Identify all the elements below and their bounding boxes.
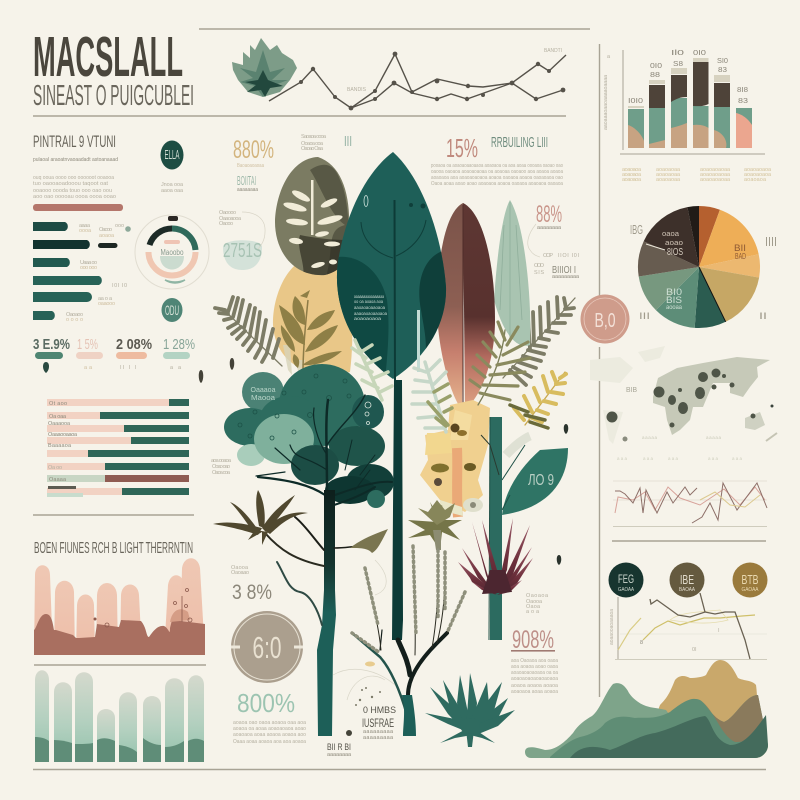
chart: world map: aaa [617, 456, 627, 461]
stat: 88%: SIS [534, 270, 544, 276]
illustration: maroon fan palm [458, 518, 533, 595]
icon: sage oval badge [162, 298, 182, 322]
stat: 908%: aoaoaoa aoaa aoaoa [511, 689, 559, 695]
chart: horizontal bars: aa o a [98, 296, 113, 302]
chart: green bars [35, 670, 204, 762]
stat: 800%: Oaaa aoaa aoaoa aoa aoa aoaoa [233, 739, 307, 745]
text block: pulaoal araoatnvaoaadadt astoanaaad [33, 157, 118, 163]
chart: stacked columns: 8I8 [737, 87, 748, 94]
text block: ooaooo oooda touo ooo oao oou [33, 188, 112, 194]
gauge badge [231, 611, 303, 683]
stat: 15% and paragraph [431, 133, 564, 187]
chart: stacked columns: aoaoaoaoa [744, 172, 772, 178]
stats row: 3 E.9% [33, 336, 70, 353]
chart: horizontal bars: ooo [115, 223, 124, 229]
illustration: right pale and olive ferns [412, 322, 530, 432]
stat: 908%: Oaoa [526, 604, 541, 610]
rose bar [33, 204, 123, 211]
stat: 908%: Oaooa [526, 599, 543, 605]
illustration: thin curves and labels: BII R BI [327, 742, 351, 752]
illustration: pale fern behind tree [352, 340, 392, 400]
stat: 3 8%: Oaoaao [231, 570, 249, 576]
chart: horizontal bars: aaaa [79, 223, 91, 229]
illustration: big teal leaf: aaaoaoaoaaoaoa [354, 311, 387, 316]
bottom rule [33, 768, 766, 770]
icon: green oval badge: Jnoa ooa [161, 182, 184, 188]
illustration: lower flowering branches [352, 545, 465, 736]
chart: pie [630, 206, 777, 328]
chart: stacked columns: 83 [738, 98, 748, 105]
chart: stacked horizontal bars [47, 399, 189, 497]
illustration: left tree canopy: Oaaaoa [250, 385, 276, 394]
callout: 2751 pale blob: Oaoooo [219, 210, 236, 216]
chart: pink mountains [34, 558, 205, 655]
top line chart: BANDIS [347, 87, 366, 93]
chart: world map: aaa [643, 456, 653, 461]
chart: stacked horizontal bars: Oa oo [48, 465, 62, 471]
icons: three round badges [608, 562, 768, 598]
chart: stacked horizontal bars: Oa oaa [49, 414, 67, 420]
illustration: pale streaks [283, 345, 305, 378]
icon: green oval badge: aaoa oaa [161, 188, 184, 194]
illustration: big teal leaf: aoaoaoaoa [354, 316, 382, 321]
icons: three round badges: GAOAA [742, 587, 759, 593]
illustration: central trunk [392, 200, 403, 640]
chart: pie: aoao [665, 240, 683, 247]
callout: 2751 pale blob [219, 210, 265, 270]
chart: line chart with axis [609, 593, 767, 660]
chart: stacked columns: aoaoaoa [744, 177, 767, 183]
chart: horizontal bars: I0I I0 [112, 283, 127, 289]
text: Oaoa ooa [212, 470, 231, 476]
callout: 2751 pale blob: Oaooo [219, 221, 233, 227]
chart: horizontal bars [33, 222, 131, 323]
chart: stacked columns: aoaoaoa [622, 177, 642, 183]
callout: 2751 pale blob: Oaaoaooa [219, 216, 242, 222]
stat: 15% and paragraph: aoaoaoa aoa aoaoaoaoaoa aoaoa oaoaoa aoaoa oaoaoaoa oao [431, 175, 563, 181]
chart: pie: BII [734, 243, 746, 253]
gauge badge: 6:0 [252, 630, 282, 665]
rule [34, 664, 206, 666]
stats row: 2 08% [116, 336, 152, 353]
branches [265, 517, 378, 625]
chart: stacked horizontal bars: Oaaaooaaoa [48, 432, 78, 438]
stat: 880%: Saoaoa oooa [301, 134, 327, 140]
illustration: big teal leaf: aaoaoaoaaoaoa [354, 305, 385, 310]
stat: 880%: Ooaoa ooa [301, 141, 324, 147]
stat: 15% and paragraph: 15% [446, 133, 478, 163]
chart: world map: BIB [626, 387, 637, 394]
chart: stacked columns: S8 [673, 61, 683, 68]
illustration: thin curves and labels: IUSFRAE [362, 716, 394, 730]
rule [33, 514, 194, 516]
illustration: left tree canopy [224, 364, 394, 508]
chart: stacked columns: aoaoaoaa [656, 172, 681, 178]
top line chart [269, 48, 566, 110]
icon: green oval badge: ELLA [164, 147, 180, 162]
icon: top agave leaf [232, 38, 297, 97]
chart: pie: II [759, 311, 767, 321]
chart: pie: BIS [666, 295, 682, 305]
chart: stacked columns: SI0 [717, 58, 728, 65]
stat: 15% and paragraph: RRBUILING LIII [491, 134, 548, 151]
chart: stacked columns: aoaoaoaa [656, 167, 681, 173]
chart: line chart with axis: aoaaooaoaaaoa [609, 608, 615, 645]
stat: 800%: aoaoaoa aoaa aoaoa aoaoa aoo [233, 732, 306, 738]
illustration: thin curves and labels: 0 HMBS [363, 705, 396, 715]
stat: 800%: 800% [237, 688, 295, 718]
icons: three round badges: BTB [742, 572, 758, 587]
chart: stacked columns: a [607, 54, 611, 60]
text: SINEAST O PUIGCUBLEI [33, 80, 194, 112]
chart: stacked columns: aoaoaoa [622, 167, 642, 173]
stat: 880%: III [344, 133, 352, 150]
chart: pie: oaoa [662, 231, 679, 238]
chart: horizontal bars: aoaoa [99, 233, 115, 239]
header rules [33, 29, 590, 116]
illustration: monstera leaf [275, 157, 350, 285]
illustration: yellow oval behind monstera [273, 257, 352, 374]
stat: 880%: aaaaaaaa [237, 187, 259, 193]
chart: donut [135, 215, 209, 289]
chart: world map: aaaaa [642, 435, 657, 440]
chart: horizontal bars: Oaooo [99, 227, 112, 233]
chart: horizontal bars: oaaooo [98, 301, 115, 307]
stat: 908%: Oaoaoa [526, 593, 549, 599]
icons: three round badges: GAOAA [618, 587, 634, 593]
chart: stacked columns: aoaoaoaoaa [700, 172, 731, 178]
illustration: teal leaf with label: ЛО 9 [528, 472, 554, 489]
chart: world map [590, 346, 777, 461]
header: title block: MACSLALL [33, 25, 183, 89]
chart: mountain area [525, 660, 768, 758]
illustration: thin curves and labels [199, 358, 568, 758]
stats row: a a [170, 365, 182, 371]
stat: 908%: aoaoa aoaoa aoaoa [511, 683, 559, 689]
stat: 908%: 908% [512, 626, 554, 654]
illustration: sage leaf [494, 200, 530, 346]
chart: stacked columns: I0I0 [628, 98, 643, 105]
stat: 3 8%: Oaooa [231, 565, 249, 571]
chart: stacked columns: Il0 [671, 50, 684, 57]
stat: 908%: aoaoaoaoaoaoa oa oa [511, 670, 559, 676]
illustration: bottom agave [425, 673, 515, 747]
heading: PINTRAIL 9 VTUNI [33, 132, 116, 151]
chart: stacked horizontal bars: Oaaaooa [48, 421, 71, 427]
stat: 15% and paragraph: Oaoa aoaa aoao aoao aoaoaoa aoaoa oaoaoa aoaoaoa oaoaoa [431, 181, 564, 187]
chart: jagged line chart [613, 481, 767, 526]
illustration: small olive branch [279, 290, 342, 372]
header: title block [33, 25, 194, 112]
icon: sage oval badge: ODU [165, 302, 179, 318]
chart: stacked columns: aaoaaaoaaoaaaaoaaaa [603, 74, 609, 130]
chart: world map: aaa [668, 456, 678, 461]
illustration: thin curves and labels: aaaaaaaa [327, 752, 352, 758]
chart: pie: IIII [765, 234, 777, 249]
chart: pie: III [639, 311, 650, 321]
text block: aoo oao ooooau oooa oooa ooao [33, 194, 116, 200]
pink badge: B,0 [594, 310, 616, 332]
chart: world map: aaa [708, 456, 718, 461]
chart: horizontal bars: Oaoaoo [66, 312, 83, 318]
stat: 88%: IIOI I0I [558, 253, 579, 259]
icons: three round badges: BAOAA [679, 587, 695, 593]
icons: three round badges: FEG [618, 572, 634, 586]
chart: pie: aooaa [666, 305, 683, 311]
illustration: thin curves and labels: aaaaaaaaa [363, 729, 394, 735]
illustration: yellow fern [510, 372, 566, 428]
chart: stacked horizontal bars: Oaaaa [49, 477, 67, 483]
icons: three round badges: IBE [680, 572, 694, 587]
chart: line chart with axis: 8 [640, 640, 643, 646]
stat: 88%: aaaaaaaaa [552, 274, 580, 280]
chart: stacked columns: aoaoaoaa [656, 177, 681, 183]
chart: pie: 8IOS [667, 247, 683, 258]
stat: 3 8% [231, 565, 272, 604]
stats row [33, 336, 195, 373]
stats row: a a [84, 365, 93, 371]
stat: 800% [233, 688, 307, 745]
chart: stacked columns [603, 50, 772, 183]
stats row: 1 5% [77, 336, 98, 353]
icon: green oval badge [160, 140, 184, 194]
chart: horizontal bars: oooa [79, 228, 92, 234]
illustration: left tree canopy: Maooa [251, 393, 276, 402]
illustration: big teal leaf: aaaaaaaaaaaaaaaa [354, 294, 384, 299]
right panel divider [598, 44, 600, 697]
stat: 880%: BOIITAI [237, 173, 256, 188]
illustration: olive star flower [408, 500, 462, 550]
stats row: II I I [120, 365, 136, 371]
stat: 800%: aoaoa oao oaoa aoaoa oaa aoa [233, 720, 307, 726]
chart: stacked columns: 83 [718, 67, 727, 74]
stat: 15% and paragraph: pooaoa oa aoaoaoaaoaaoa aoaoaoa oa aoa aoaa oooaoa oaoao oao [431, 163, 563, 169]
illustration: thin curves and labels: aaaaaaaaa [363, 735, 394, 741]
illustration: big teal leaf [336, 152, 446, 379]
callout: 2751 pale blob: 2751S [223, 240, 262, 262]
chart: pie: BAD [735, 252, 746, 261]
chart: horizontal bars: Uaaa oo [80, 260, 97, 266]
pink badge [580, 294, 630, 344]
illustration: dark star plant [213, 490, 308, 545]
chart: line chart with axis: 0I [692, 647, 697, 653]
text block: tuo oaooaoadooou taqoot oat [33, 181, 108, 187]
top line chart: BANDTI [544, 48, 562, 54]
chart: world map: aaaaa [706, 435, 721, 440]
chart: stacked columns: aoaoaoaoa [744, 167, 772, 173]
illustration: left tree trunk [265, 490, 378, 736]
text block: ouq ooua oooo ooo oooooot ooaooa [33, 175, 115, 181]
text block [33, 157, 118, 200]
stat: 88%: OOP [543, 253, 553, 259]
stat: 15% and paragraph: oaooa oaoaoa aoaoaoaoaa oa aoaoaa oaoaoo aoa aoaoa aoaoa [431, 169, 564, 175]
chart: world map: aaa [732, 456, 742, 461]
stat: 88%: BIIIOI I [552, 265, 576, 276]
stat: 800%: aoaoa oa aoaa aoaoaoaoa aoao [233, 726, 306, 732]
chart: horizontal bars: oooo [66, 317, 83, 323]
illustration: big teal leaf: oo oa aoaoa aoa [354, 299, 383, 304]
chart: stacked columns: aoaoaoaoaa [700, 177, 731, 183]
chart: pie: IBG [630, 222, 643, 237]
small text beside tree: aoa ooaoa [211, 458, 232, 464]
chart: pie: BI0 [666, 287, 682, 297]
stat: 880%: Baoaoaoaoaa [237, 163, 265, 169]
chart: stacked horizontal bars: Ot aoo [49, 401, 67, 407]
chart: stacked columns: aoaoaoa [622, 172, 642, 178]
chart: stacked horizontal bars: Baaaaoa [48, 443, 72, 449]
chart: stacked columns: aoaoaoaoaa [700, 167, 731, 173]
stats row: 1 28% [163, 336, 195, 353]
chart: stacked columns: 0I0 [693, 50, 706, 57]
stat: 88%: OOO [534, 263, 545, 269]
panel: left intro [33, 132, 123, 211]
chart: donut: Maoobo [160, 248, 184, 257]
stat: 908%: aoa Oaoaoa aoa oaoa [511, 658, 559, 664]
illustration: brown leaf [437, 203, 495, 410]
chart: horizontal bars: ooo ooo [80, 265, 97, 271]
stat: 880%: Oaoao Oaa [301, 146, 324, 152]
stat: 88% [528, 201, 580, 280]
chart: stacked columns: 88 [650, 72, 660, 79]
stat: 880%: 880% [233, 136, 274, 164]
heading: area chart: BOEN FIUNES RCH B LIGHT THERRNTIN [34, 540, 193, 557]
illustration: left fern [215, 297, 282, 366]
illustration: right fern [503, 297, 575, 385]
stat: 908%: aoa [526, 609, 540, 615]
illustration: yellow flower cluster [420, 400, 490, 517]
illustration: olive sprig [350, 529, 388, 553]
illustration: teal leaf with label [502, 436, 568, 515]
stat: 88%: 88% [536, 201, 562, 228]
rule [612, 540, 766, 542]
stat: 908%: aoaoaoaoaoaoaoaoa [511, 676, 559, 682]
stat: 3 8%: 3 8% [232, 581, 272, 604]
text: Ooao oao [212, 464, 230, 470]
stat: 908% [511, 593, 559, 695]
stat: 88%: aaaaaaaa [537, 225, 562, 231]
stat: 908%: aoa aoaoa aoao oaoa [511, 664, 559, 670]
stat: 880% [233, 133, 352, 193]
illustration: right pole [481, 417, 502, 640]
chart: stacked columns: 0I0 [650, 63, 662, 70]
chart: line chart with axis: I [718, 628, 720, 634]
